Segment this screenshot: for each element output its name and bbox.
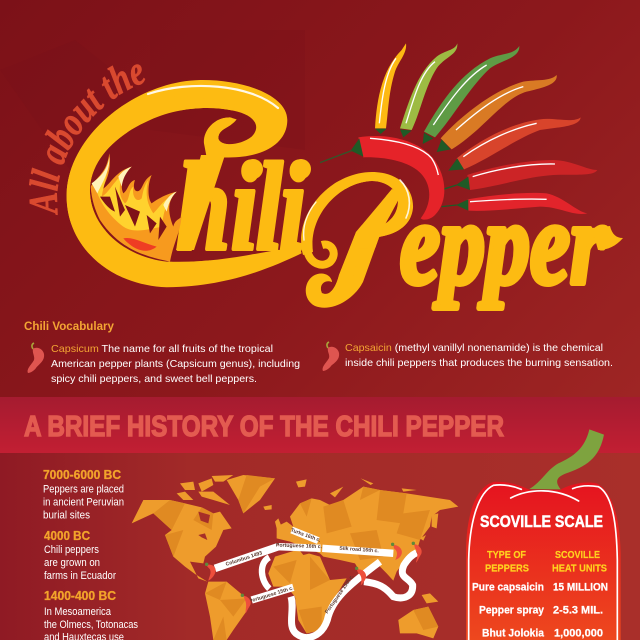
chili: red — [443, 160, 597, 190]
icon: flames inside the C — [91, 153, 182, 262]
text block: Capsicum: spicy chili peppers, and sweet bell peppers. — [51, 373, 257, 385]
icon: bell pepper — [466, 429, 621, 640]
scoville table rows: 1,000,000 — [554, 628, 603, 640]
route labels: Silk road 16th c. — [339, 546, 380, 554]
scoville table rows: Bhut Jolokia — [482, 628, 545, 640]
pepper body — [466, 482, 621, 640]
heading: brief history: A BRIEF HISTORY OF THE CHILI PEPPER — [24, 411, 504, 443]
chili: bright red — [442, 193, 587, 214]
entry: 4000 BC: Chili peppers — [44, 544, 100, 556]
entry: 4000 BC: 4000 BC — [44, 529, 90, 543]
i dots — [243, 159, 311, 179]
text block: Capsaicin: inside chili peppers that produces the burning sensation. — [345, 357, 613, 369]
scoville table header: PEPPERS — [485, 562, 529, 574]
route ribbons — [215, 530, 417, 637]
entry: 7000-6000 BC: in ancient Peruvian — [43, 496, 124, 508]
chili: orange-red — [448, 117, 581, 171]
subtitle: All about the: All about the — [29, 64, 146, 216]
scoville table rows — [472, 582, 608, 640]
chili fan illustration — [320, 43, 597, 220]
scoville table header — [485, 549, 607, 574]
entry: 1400-400 BC: the Olmecs, Totonacas — [44, 619, 139, 631]
scoville table rows: 2-5.3 MIL. — [553, 604, 603, 616]
scoville table header: HEAT UNITS — [552, 562, 607, 574]
scoville table header: TYPE OF — [487, 549, 526, 561]
title highlights — [148, 86, 409, 240]
letters hili: hili — [176, 137, 306, 277]
text block: Capsaicin — [345, 342, 613, 369]
letter P with swirl loop: P — [317, 141, 411, 329]
text block: Capsicum: American pepper plants (Capsicum genus), including — [51, 358, 300, 370]
pepper highlights — [469, 485, 617, 640]
route labels: Turks 16th c. — [290, 528, 322, 544]
dark land detail — [198, 512, 317, 555]
pepper stem — [529, 429, 604, 489]
entry: 7000-6000 BC: burial sites — [43, 510, 91, 522]
scoville table rows: Pure capsaicin — [472, 582, 544, 594]
world map — [132, 475, 458, 640]
scoville title: SCOVILLE SCALE — [480, 513, 603, 531]
chili: large red arc — [320, 136, 444, 220]
chili: green — [423, 46, 519, 144]
letter C with swash — [66, 80, 302, 288]
letter C with swash: C — [52, 35, 238, 334]
text block: Capsaicin: Capsaicin (methyl vanillyl nonenamide) is the chemical — [345, 342, 603, 354]
entry: 7000-6000 BC: Peppers are placed — [43, 484, 124, 496]
map chili stems — [205, 542, 415, 597]
entry: 4000 BC — [44, 529, 116, 582]
r flag — [592, 226, 623, 250]
route labels: Portuguese 16th c. — [276, 543, 323, 550]
entry: 4000 BC: are grown on — [44, 557, 100, 569]
h stem join — [176, 155, 225, 250]
entry: 1400-400 BC: In Mesoamerica — [44, 606, 111, 618]
icon: small chili 1 — [28, 343, 44, 373]
shaded facets — [153, 475, 438, 640]
route labels: Portuguese 15th c. — [324, 573, 356, 615]
route labels: Columbus 1493 — [225, 550, 263, 568]
entry: 7000-6000 BC: 7000-6000 BC — [43, 468, 121, 482]
icon: small chili 2 — [323, 342, 339, 371]
continents — [132, 475, 458, 640]
route labels: Portuguese 15th c. — [248, 585, 295, 605]
chili: yellow — [375, 43, 406, 134]
text block: Capsicum: Capsicum The name for all fruits of the tropical — [51, 343, 273, 355]
scoville table rows: 15 MILLION — [553, 582, 608, 594]
scoville table header: SCOVILLE — [555, 549, 600, 561]
letter P with swirl loop — [301, 172, 414, 308]
route labels — [225, 528, 380, 615]
title: Chili Pepper — [66, 80, 623, 311]
timeline text — [43, 468, 139, 640]
entry: 1400-400 BC — [44, 589, 139, 640]
history band — [0, 397, 640, 453]
chili: light green — [400, 43, 457, 137]
chili: orange — [437, 75, 557, 152]
entry: 7000-6000 BC — [43, 468, 124, 522]
entry: 1400-400 BC: 1400-400 BC — [44, 589, 116, 603]
entry: 4000 BC: farms in Ecuador — [44, 570, 116, 582]
text block: Capsicum — [51, 343, 300, 385]
heading: Chili Vocabulary: Chili Vocabulary — [24, 321, 115, 333]
scoville panel — [466, 429, 621, 640]
map chili markers — [206, 544, 422, 613]
scoville table rows: Pepper spray — [479, 604, 544, 616]
